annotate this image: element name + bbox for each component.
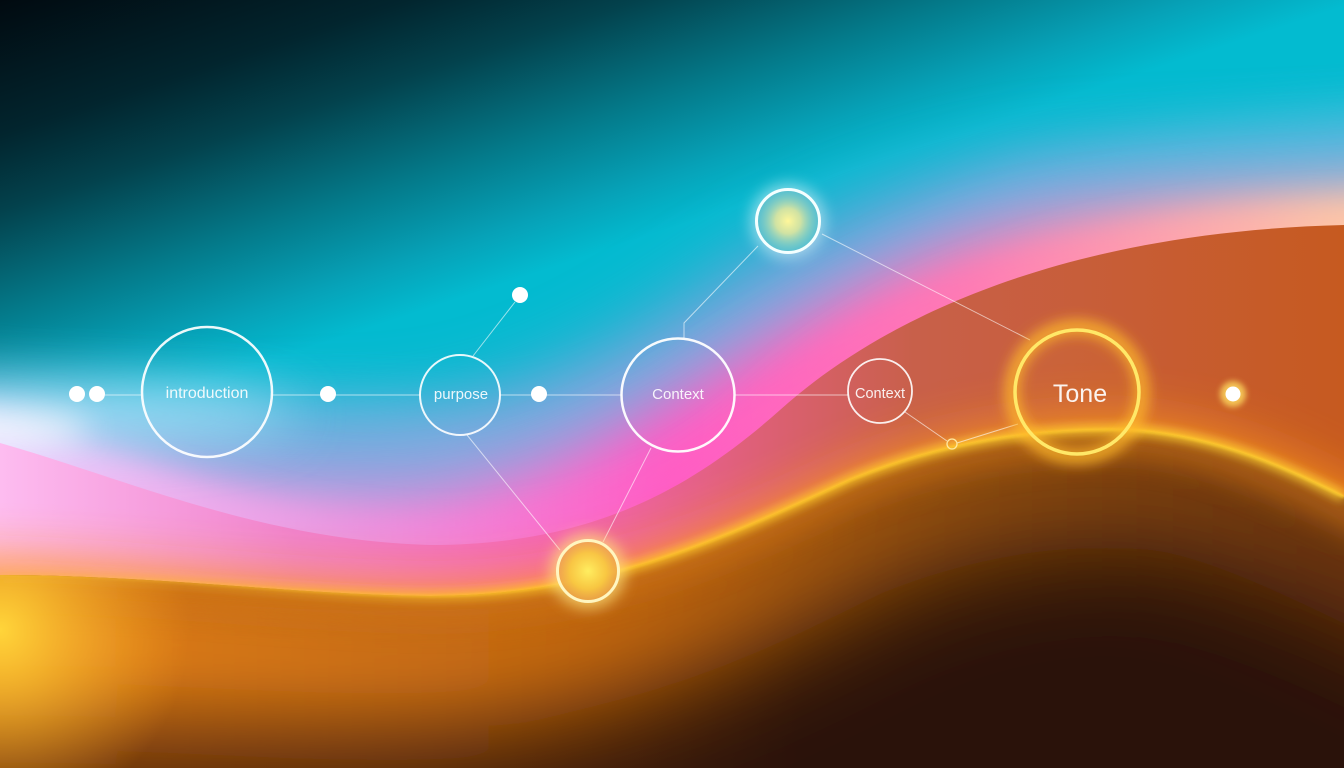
- node: second context: [848, 359, 912, 423]
- node: top glowing circle: [750, 183, 826, 259]
- node dot: [531, 386, 547, 402]
- background: lower orange ground with glowing yellow crest: [0, 400, 1344, 768]
- node: small ring: [947, 439, 957, 449]
- node dot: right glow: [1220, 381, 1246, 407]
- node: purpose: [420, 355, 500, 435]
- node: introduction: introduction: [166, 385, 248, 402]
- node: tone: Tone: [1053, 380, 1107, 408]
- node dot: [320, 386, 336, 402]
- node: context: [622, 338, 734, 452]
- node: context: Context: [652, 386, 705, 403]
- node: bottom glowing circle: [550, 533, 626, 609]
- node: tone: [1012, 327, 1142, 457]
- connector lines: [105, 234, 1030, 550]
- node: introduction: [142, 327, 272, 457]
- node dots: left pair: [69, 386, 105, 402]
- background: light blue, lavender and pink glow above the wave: [0, 95, 1344, 620]
- node dot: upper branch: [512, 287, 528, 303]
- background: middle wave band: [0, 225, 1344, 768]
- node: second context: Context: [855, 386, 905, 402]
- node: purpose: purpose: [434, 386, 488, 403]
